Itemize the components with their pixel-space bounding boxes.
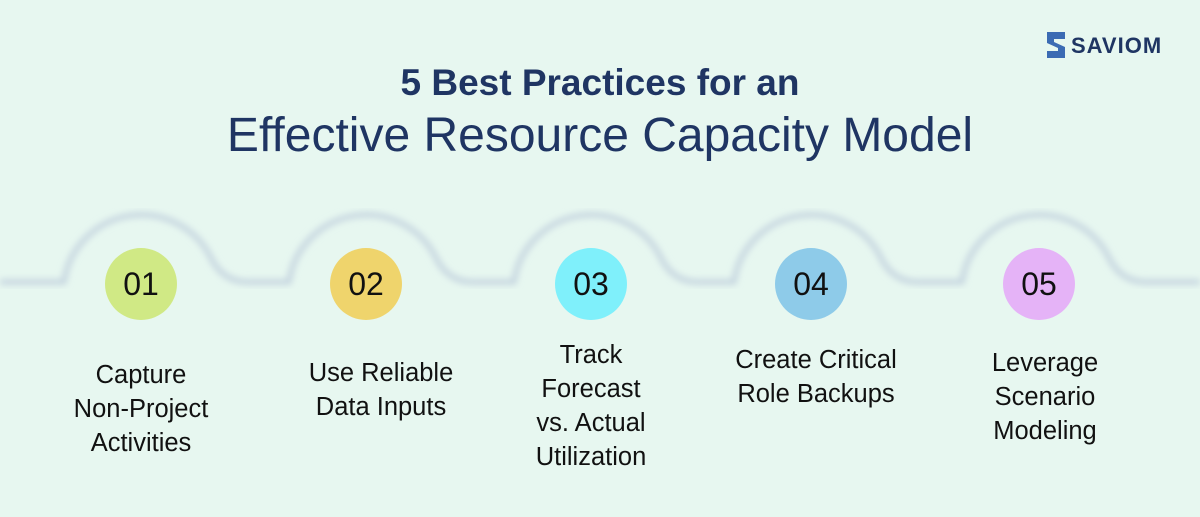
step 3 [555,248,627,320]
step 5: 05 [1021,266,1057,302]
step 5 [1003,248,1075,320]
label 5: Leverage [992,349,1098,377]
label 1: Capture [96,361,186,389]
label 2 [309,359,453,421]
logo: SAVIOM [1071,33,1162,58]
step 2 [330,248,402,320]
step 1: 01 [123,266,159,302]
step 4: 04 [793,266,829,302]
subtitle: Effective Resource Capacity Model [227,109,973,162]
label 1: Non-Project [74,395,208,423]
label 2: Use Reliable [309,359,453,387]
label 1: Activities [91,429,191,457]
label 5 [992,349,1098,445]
step 1 [105,248,177,320]
label 3 [536,341,646,471]
title: 5 Best Practices for an [401,62,799,103]
label 1 [74,361,208,457]
step 4 [775,248,847,320]
label 3: Utilization [536,443,646,471]
label 5: Scenario [995,383,1095,411]
label 4 [735,346,897,408]
label 3: vs. Actual [536,409,646,437]
label 4: Role Backups [737,380,895,408]
step 3: 03 [573,266,609,302]
label 3: Forecast [541,375,641,403]
label 5: Modeling [993,417,1097,445]
label 3: Track [560,341,622,369]
label 2: Data Inputs [316,393,446,421]
step 2: 02 [348,266,384,302]
label 4: Create Critical [735,346,897,374]
